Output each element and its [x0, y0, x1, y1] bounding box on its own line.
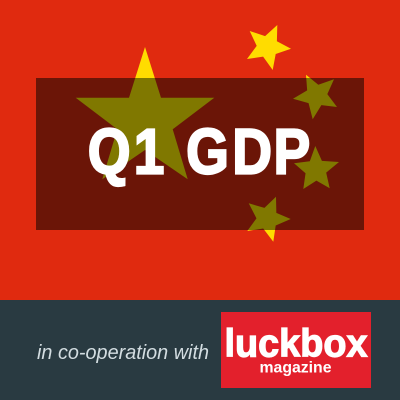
flag stars: [76, 25, 339, 242]
logo subtitle: magazine: [260, 360, 332, 376]
title panel: translucent dark overlay: [36, 78, 364, 230]
logo: luckbox magazine: [221, 312, 371, 388]
background: red flag field: [0, 0, 400, 300]
co-operation text: in co-operation with: [37, 342, 209, 364]
footer bar: [0, 300, 400, 400]
logo wordmark: luckbox: [224, 322, 368, 366]
title: Q1 GDP: [88, 116, 310, 187]
flag stars seen through the panel: [76, 78, 339, 230]
logo background: [221, 312, 371, 388]
